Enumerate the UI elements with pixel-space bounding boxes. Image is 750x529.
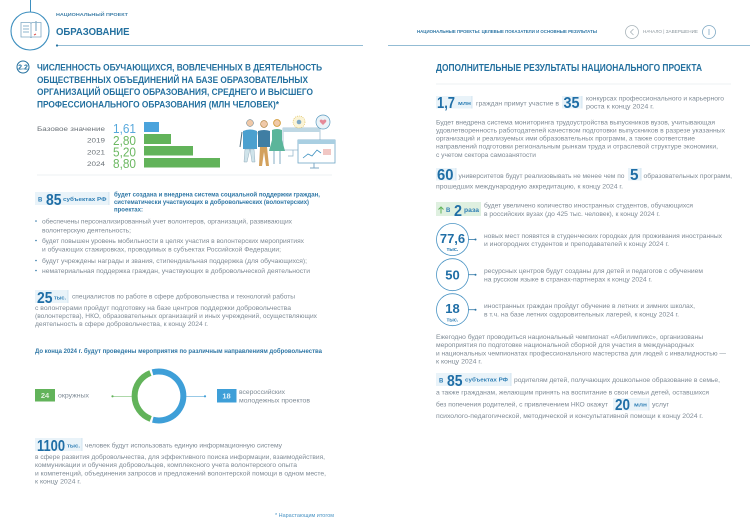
- bold lead text: [114, 192, 320, 214]
- panel: 85 regions parents support: [436, 373, 720, 420]
- legend: 24 district: [35, 389, 90, 402]
- running header: НАЦИОНАЛЬНЫЕ ПРОЕКТЫ: ЦЕЛЕВЫЕ ПОКАЗАТЕЛИ И ОСНОВНЫЕ РЕЗУЛЬТАТЫ: [417, 29, 597, 35]
- text: [436, 376, 720, 408]
- stat: 1.7 million: млн: [458, 101, 471, 107]
- person middle: [258, 121, 270, 166]
- circle stat 50: 50: [445, 268, 460, 282]
- stat: 1.7 million: [436, 95, 472, 112]
- legend: 18 all-russian: 18: [222, 392, 231, 400]
- bar row: base value: 1,61: [113, 121, 136, 136]
- icon: students and monitors illustration: [240, 115, 335, 168]
- bullet list: будут учреждены награды и звания, стипендиальная поддержка (для обучающихся);: [42, 257, 307, 265]
- stat: 2 times with arrow: 2: [454, 203, 462, 220]
- bar row: 2019: 2019: [87, 138, 105, 144]
- stat: 85 regions: [436, 373, 511, 390]
- panel: 1100 thousand people: [35, 438, 326, 486]
- subheading: events: До конца 2024 г. будут проведены мероприятия по различным направлениям добровольчества: [35, 348, 323, 355]
- stat: 5: 5: [630, 167, 639, 184]
- paragraph: Abilympics: к концу 2024 г.: [436, 358, 482, 366]
- text: иностранных граждан пройдут обучение в летних и зимних школах,: [484, 302, 695, 310]
- text: на русском языке в странах-партнерах к концу 2024 г.: [484, 276, 652, 284]
- text: [436, 172, 732, 190]
- legend: 18 all-russian: [217, 388, 311, 404]
- footnote: * Нарастающим итогом: [275, 513, 334, 519]
- bullet list: волонтерскую деятельность;: [42, 228, 131, 234]
- text: образовательных программ,: [644, 172, 732, 180]
- heart badge: [316, 115, 330, 129]
- description: деятельность в сфере добровольчества, к концу 2024 г.: [35, 320, 208, 328]
- donut blue segment: [152, 371, 183, 420]
- circle stat 77,6: 77,6: [440, 231, 465, 246]
- text: будет увеличено количество иностранных студентов, обучающихся: [484, 202, 694, 210]
- donut chart: [35, 371, 311, 420]
- green connector: [111, 395, 132, 397]
- header rule: [388, 44, 750, 46]
- paragraph: monitoring system: Будет внедрена система мониторинга трудоустройства выпускников вузов, учитывающая: [436, 118, 716, 126]
- stat: 85 regions: В: [38, 198, 43, 204]
- description: коммуникации и обучения добровольцев, комплексного учета волонтерского опыта: [35, 461, 297, 469]
- description: (волонтерства), НКО, образовательных организаций и иных учреждений, осуществляющих: [35, 312, 318, 320]
- circle stat 18: [436, 294, 476, 326]
- paragraph: Abilympics: мероприятия по подготовке национальной сборной для участия в международных: [436, 341, 695, 349]
- bar chart: [37, 121, 220, 171]
- text: [484, 202, 694, 218]
- panel: 1.7 million and 35 contests: [436, 95, 724, 112]
- badge 2.2: 2.2: [18, 64, 28, 72]
- panel: header left: [11, 0, 363, 50]
- bar row: 2019: 2,80: [113, 133, 136, 148]
- text: родителям детей, получающих дошкольное образование в семье,: [514, 376, 720, 384]
- text: и иногородних студентов и преподавателей к концу 2024 г.: [484, 240, 669, 248]
- idea badge: [293, 116, 305, 128]
- stat: 60: 60: [437, 167, 454, 184]
- text: прошедших международную аккредитацию, к концу 2024 г.: [436, 184, 623, 190]
- stat: 20 million: млн: [634, 402, 647, 408]
- paragraph: monitoring system: организаций и реализуемых ими образовательных программ, а также соответствие: [436, 134, 695, 142]
- legend: 18 all-russian: молодежных проектов: [239, 398, 311, 404]
- paragraph: monitoring system: направлений подготовки региональным рынкам труда и отраслевой структуре экономики,: [436, 142, 718, 150]
- text: конкурсах профессионального и карьерного: [586, 96, 724, 102]
- panel: 25 thousand specialists: [35, 290, 318, 328]
- donut green segment: [135, 373, 151, 419]
- stat: 85 regions: [35, 192, 109, 209]
- stat: 25 thousand: [35, 290, 68, 307]
- stat: 85 regions: субъектах РФ: [63, 196, 107, 203]
- stat: 85 regions: субъектах РФ: [465, 376, 508, 384]
- bullet list: и обучающих стажировках, проводимых в субъектах Российской Федерации;: [42, 246, 281, 254]
- text: в т.ч. на базе летних оздоровительных лагерей, к концу 2024 г.: [484, 310, 679, 318]
- stat: 85 regions: 85: [46, 192, 62, 209]
- stat: 2 times with arrow: В: [446, 208, 451, 214]
- label: national project: НАЦИОНАЛЬНЫЙ ПРОЕКТ: [56, 10, 128, 18]
- heading text: ОБЩЕСТВЕННЫХ ОБЪЕДИНЕНИЙ НА БАЗЕ ОБРАЗОВАТЕЛЬНЫХ: [37, 74, 309, 86]
- bar row: base value: [37, 121, 159, 136]
- paragraph: Abilympics: [436, 333, 727, 366]
- heading text: ПРОФЕССИОНАЛЬНОГО ОБРАЗОВАНИЯ (МЛН ЧЕЛОВЕК)*: [37, 100, 279, 110]
- bullet list: будет повышен уровень мобильности в целях участия в волонтерских мероприятиях: [42, 237, 305, 245]
- navigation label: НАЧАЛО | ЗАВЕРШЕНИЕ: [643, 29, 698, 34]
- text: новых мест появятся в студенческих городках для проживания иностранных: [484, 233, 723, 240]
- panel: 18 thousand foreign citizens: [436, 294, 695, 326]
- bullet list: [35, 218, 310, 275]
- heading: indicator 2.2: [17, 61, 322, 110]
- bar row: 2019: [87, 133, 171, 148]
- description: человек будут использовать единую информационную систему: [85, 442, 283, 450]
- icon: back arrow: [626, 26, 638, 38]
- panel: 77.6 thousand places: [436, 224, 723, 256]
- legend: 24 district: 24: [41, 391, 50, 400]
- stat: 1100 thousand: 1100: [37, 438, 65, 455]
- stat: 85 regions: 85: [447, 373, 463, 390]
- description: в сфере развития добровольчества, для эффективного поиска информации, взаимодействия,: [35, 453, 325, 461]
- circle stat 18: тыс.: [447, 318, 459, 324]
- stat: 85 regions: В: [439, 378, 444, 384]
- description: [35, 292, 318, 328]
- description: и компетенций, объединения запросов и предложений волонтерской помощи в одном месте,: [35, 470, 326, 478]
- bar row: 2021: 5,20: [113, 144, 136, 160]
- description: специалистов по работе в сфере добровольчества и технологий работы: [72, 292, 295, 300]
- text: психолого-педагогической, методической и консультативной помощи к концу 2024 г.: [436, 412, 703, 420]
- legend: 18 all-russian: всероссийских: [239, 388, 286, 396]
- panel: 50 resource centers: [436, 259, 703, 291]
- text: роста к концу 2024 г.: [586, 104, 654, 110]
- header rule: [56, 44, 363, 47]
- bar row: 2024: [87, 156, 220, 171]
- bar row: 2021: 2021: [87, 150, 105, 156]
- text: [484, 302, 695, 318]
- panel: doubled foreign students: [436, 202, 694, 220]
- stat: 2 times with arrow: [436, 202, 481, 220]
- text: услуг: [652, 402, 670, 408]
- circle stat 18: 18: [445, 301, 460, 316]
- front monitor: [298, 140, 335, 168]
- heading text: ЧИСЛЕННОСТЬ ОБУЧАЮЩИХСЯ, ВОВЛЕЧЕННЫХ В ДЕЯТЕЛЬНОСТЬ: [37, 62, 322, 74]
- icon: info: [702, 26, 716, 38]
- bullet list: обеспечены персонализированный учет волонтеров, организаций, развивающих: [42, 218, 293, 226]
- stat: 20 million: [613, 397, 649, 414]
- bullet list: нематериальная поддержка граждан, участвующих в добровольческой деятельности: [42, 267, 310, 275]
- description: [35, 442, 326, 486]
- text: ресурсных центров будут созданы для детей и педагогов с обучением: [484, 267, 703, 275]
- text: университетов будут реализовывать не менее чем по: [458, 172, 625, 180]
- panel: 85 regions support system: [35, 192, 320, 275]
- circle stat 77,6: тыс.: [447, 247, 459, 253]
- panel: header right: [388, 26, 750, 46]
- bold lead text: будет создана и внедрена система социальной поддержки граждан,: [114, 192, 320, 198]
- stat: 25 thousand: 25: [37, 290, 53, 307]
- circle stat 50: [436, 259, 476, 291]
- stat: 2 times with arrow: раза: [464, 208, 480, 214]
- stat: 35: 35: [564, 95, 580, 112]
- text: без попечения родителей, с привлечением НКО окажут: [436, 400, 608, 408]
- stat: 20 million: 20: [615, 397, 630, 414]
- icon: open book in circle: [11, 0, 49, 50]
- bold lead text: проектах:: [114, 206, 143, 214]
- description: с волонтерами пройдут подготовку на базе центров поддержки добровольчества: [35, 304, 291, 312]
- text: [436, 402, 703, 420]
- bar row: base value: Базовое значение: [37, 126, 105, 133]
- paragraph: monitoring system: [436, 118, 726, 159]
- text: граждан примут участие в: [476, 100, 560, 108]
- blue connector: [186, 395, 206, 397]
- text: [586, 96, 724, 110]
- heading text: [37, 62, 322, 110]
- text: [484, 267, 703, 284]
- circle stat 77,6: [436, 224, 476, 256]
- paragraph: monitoring system: удовлетворенность работодателей качеством подготовки выпускников в разрезе указанных: [436, 126, 726, 134]
- text: в российских вузах (до 425 тыс. человек), к концу 2024 г.: [484, 210, 660, 218]
- paragraph: Abilympics: Ежегодно будет проводиться национальный чемпионат «Абилимпикс», организованы: [436, 333, 703, 341]
- person left: [240, 120, 260, 162]
- text: а также гражданам, желающим принять на воспитание в свои семьи детей, оставшихся: [436, 388, 710, 396]
- description: к концу 2024 г.: [35, 478, 81, 486]
- panel: 60 universities: [436, 167, 732, 190]
- bar row: 2021: [87, 144, 193, 160]
- legend: 24 district: окружных: [58, 392, 90, 400]
- stat: 1.7 million: 1,7: [437, 95, 455, 112]
- heading text: ОРГАНИЗАЦИЙ ОБЩЕГО ОБРАЗОВАНИЯ, СРЕДНЕГО И ВЫСШЕГО: [37, 86, 313, 98]
- bold lead text: систематически участвующих в добровольческих (волонтерских): [114, 199, 309, 206]
- paragraph: monitoring system: с учетом сектора самозанятости: [436, 152, 536, 159]
- paragraph: Abilympics: и национальных чемпионатах профессионального мастерства для людей с инвалидностью —: [436, 350, 727, 358]
- stat: 1100 thousand: тыс.: [67, 444, 80, 450]
- stat: 5: [628, 167, 641, 184]
- bar row: 2024: 2024: [87, 161, 105, 168]
- bar row: 2024: 8,80: [113, 156, 136, 171]
- text: [484, 233, 723, 248]
- back screen: [283, 128, 320, 156]
- stat: 25 thousand: тыс.: [54, 296, 66, 302]
- person right: [269, 120, 285, 164]
- heading: additional results: ДОПОЛНИТЕЛЬНЫЕ РЕЗУЛЬТАТЫ НАЦИОНАЛЬНОГО ПРОЕКТА: [436, 63, 702, 74]
- title: education: ОБРАЗОВАНИЕ: [56, 26, 130, 38]
- badge 2.2: [17, 61, 29, 73]
